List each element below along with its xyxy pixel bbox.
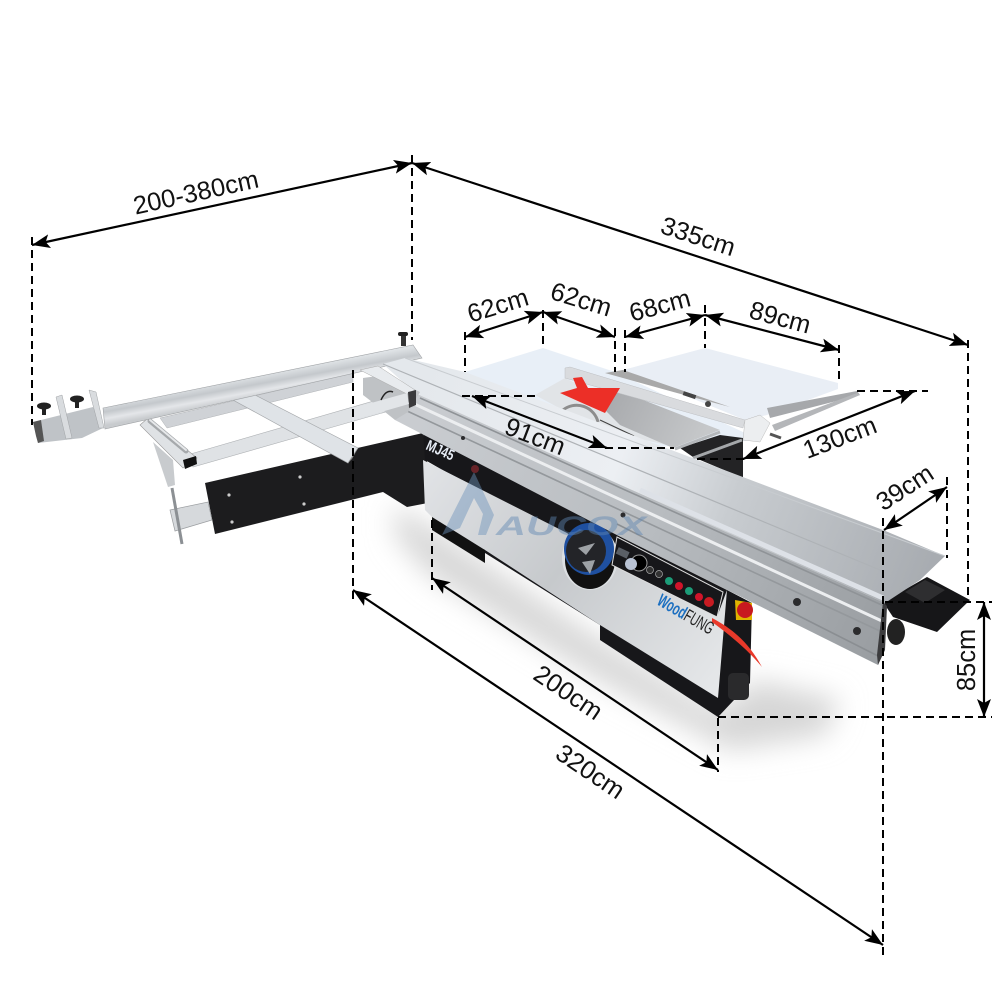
knob on beam — [398, 332, 408, 346]
control panel — [612, 537, 723, 617]
dimension: 335cm — [412, 163, 968, 345]
dark undercarriage — [680, 435, 743, 478]
outrigger frame: bars — [140, 373, 410, 469]
dimension: 85cm — [953, 602, 984, 717]
rail end cap — [877, 602, 887, 665]
machine illustration: sliding table saw — [33, 332, 970, 717]
long telescopic beam — [103, 345, 422, 429]
rubber wheel — [728, 673, 749, 700]
grey strip behind fence — [605, 370, 730, 407]
silver cross bars under fence — [675, 432, 742, 458]
front cover panel — [423, 460, 727, 698]
support bracket and rod — [153, 442, 212, 544]
saw slot — [600, 420, 634, 436]
far black end bracket — [883, 577, 970, 645]
dimension: 320cm: 320cm — [550, 739, 630, 805]
dimension: 85cm: 85cm — [953, 629, 981, 691]
left foot — [432, 517, 485, 563]
sliding table: front extrusion — [395, 393, 885, 665]
watermark logo — [442, 465, 649, 541]
dimension: 62cm right: 62cm — [547, 277, 615, 323]
emergency stop — [735, 600, 753, 620]
dimension: 335cm: 335cm — [657, 212, 739, 262]
insert around blade — [535, 378, 680, 448]
red blade guard — [560, 377, 620, 413]
floor shadow — [395, 505, 840, 750]
brand logo: WoodFUNG — [654, 590, 718, 638]
rip fence — [565, 367, 770, 448]
dimension: 39cm: 39cm — [871, 459, 939, 517]
dimension: 130cm — [743, 391, 915, 465]
dashed guide lines — [32, 155, 992, 958]
dimension: 200-380cm: 200-380cm — [131, 166, 261, 220]
bolts — [461, 436, 861, 635]
dimension: 68cm — [625, 284, 705, 337]
extension rails — [767, 391, 860, 438]
dimension: 89cm: 89cm — [746, 296, 814, 340]
back table: right wing — [623, 348, 838, 420]
dimension: 130cm: 130cm — [799, 411, 881, 465]
dimension: 89cm — [705, 296, 839, 350]
crossbar left end and stop — [353, 366, 420, 420]
dimension: 62cm left: 62cm — [464, 283, 532, 329]
saw blade — [563, 405, 598, 422]
red lever — [712, 618, 762, 667]
dimension: 200cm: 200cm — [528, 660, 608, 726]
back table: left wing — [465, 348, 760, 450]
watermark text: AUCOX — [494, 511, 649, 541]
dimension: 200cm — [432, 578, 718, 770]
dimension: 91cm — [472, 396, 607, 461]
extrusion highlights — [383, 358, 945, 657]
dimension: 91cm: 91cm — [501, 413, 569, 461]
dimension: 320cm — [353, 590, 883, 945]
machine body: black strip, rear column and feet — [423, 432, 752, 717]
outrigger arm: black — [205, 433, 433, 534]
beam end block with clamps — [33, 390, 104, 443]
sliding table: top surface — [383, 358, 945, 603]
dimension: 200-380cm — [32, 163, 412, 245]
model label: MJ45 — [423, 437, 457, 464]
dimension: 68cm: 68cm — [626, 284, 694, 328]
handwheel — [562, 523, 618, 590]
